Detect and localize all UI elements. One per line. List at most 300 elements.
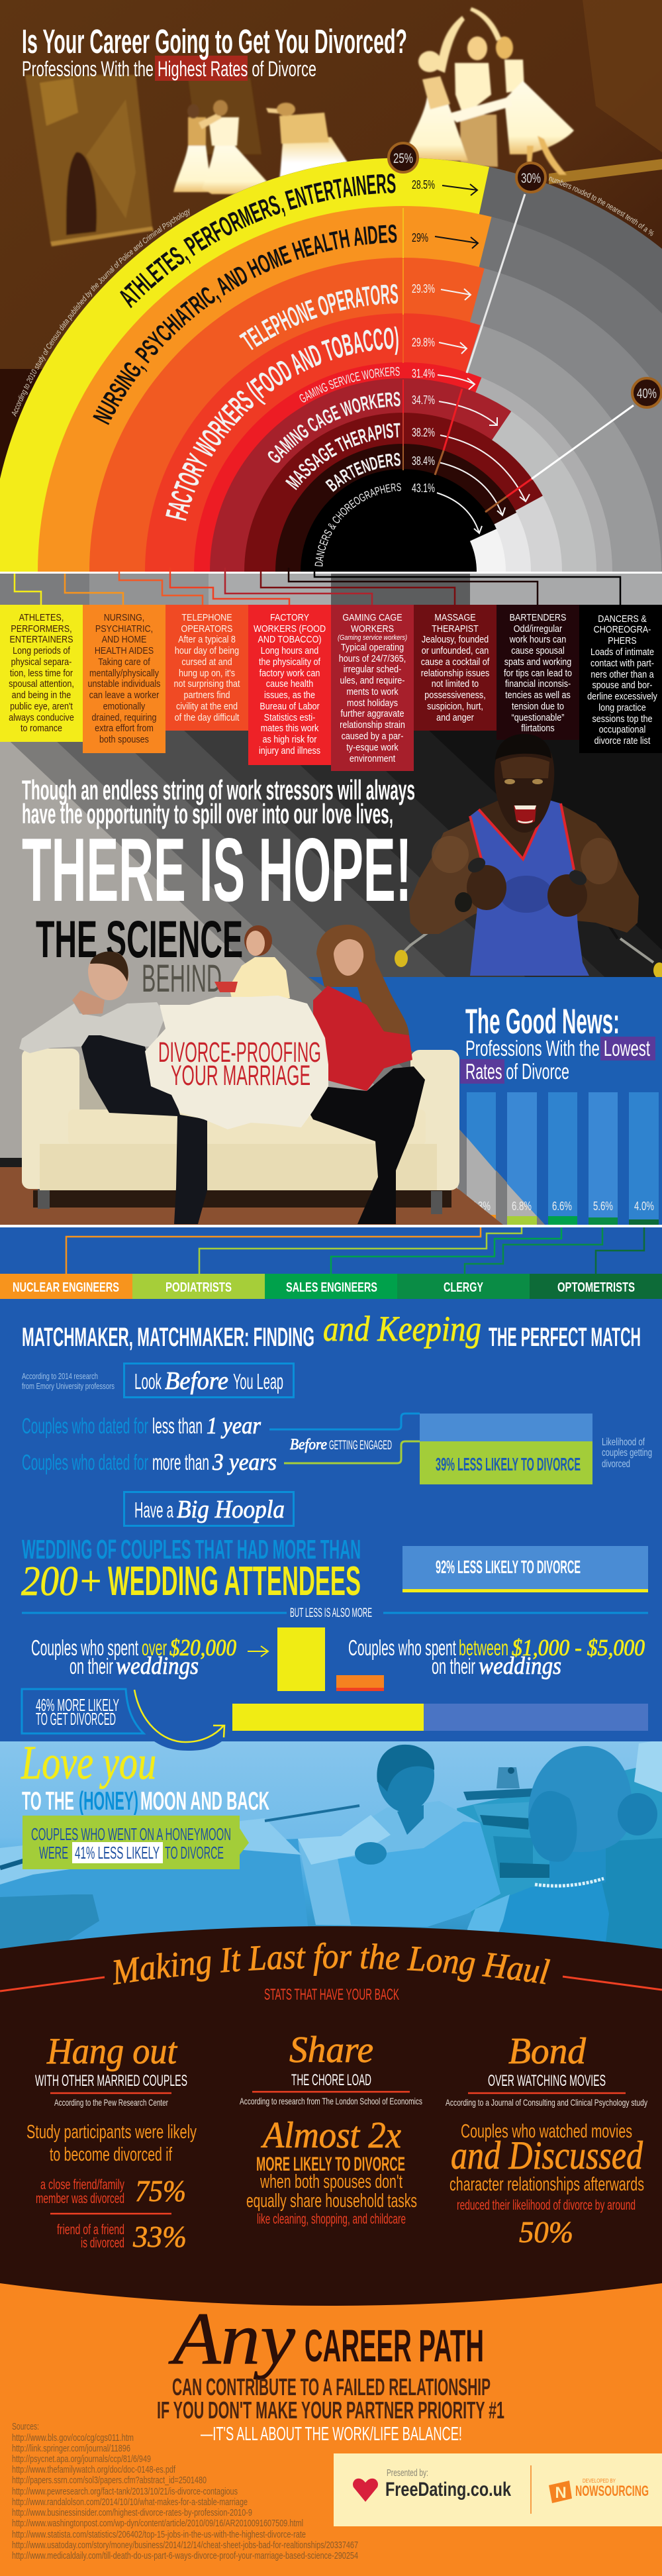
label: bartenders: BARTENDERS [325,453,401,492]
column: hang out: to become divorced if [50,2144,173,2165]
bar: clergy: 5.6% [593,1200,613,1213]
value: 38.2% [412,426,530,501]
counsellor [214,925,290,998]
column: factory: AND TOBACCO) [258,633,322,644]
column: factory: cause health [266,678,313,689]
column: factory: factory work can [260,667,320,678]
text: between 1000 and 5000 [348,1635,645,1680]
highlight behind subtitle [155,56,248,81]
box: look before you leap: You Leap [233,1369,283,1394]
blue curved tab [154,1741,222,1751]
column: telephone: OPERATORS [181,623,232,634]
bar: 39% less likely [420,1441,592,1484]
column: massage: and anger [436,711,474,723]
band: nursing [38,206,491,572]
callout: 46% more likely [22,1689,144,1733]
column: bartenders: cause spousal [511,644,565,656]
box: look before you leap [124,1363,294,1398]
column: share: when both spouses don't [260,2171,402,2192]
subheading [465,1036,650,1084]
closing message: Any [168,2298,295,2380]
text: over 20000: on their [70,1654,113,1678]
column: gaming cage: caused by a par- [342,730,403,741]
heading: honeymoon: (HONEY) [79,1787,138,1816]
column: athletes: and being in the [12,689,71,700]
closing message: —IT'S ALL ABOUT THE WORK/LIFE BALANCE! [201,2424,462,2445]
man [19,951,207,1224]
divider: but less is also more: BUT LESS IS ALSO MORE [290,1606,372,1620]
title: divorce-proofing [158,1037,321,1092]
stat: 75%: a close friend/family [40,2177,124,2192]
column: hang out: According to the Pew Research Center [54,2097,168,2108]
column: athletes: tion, less time for [10,667,73,678]
bar: 1000 to 5000 [336,1675,384,1691]
bar chart: lowest rates [467,1092,659,1225]
man on deck [298,1745,500,1927]
column: factory: Long hours and [261,644,318,656]
title block [22,23,407,81]
column: athletes: always conducive [9,711,74,723]
column: dancers: sessions top the [592,713,653,724]
right arm [541,805,639,933]
column: massage [414,605,496,731]
sweat shading on tank [500,876,553,913]
text: over 20000: $20,000 [169,1635,236,1661]
chains and handles [402,866,653,962]
text: over 20000: weddings [116,1653,199,1680]
column: dancers: occupational [599,723,645,735]
comparison: dating length [22,1412,652,1484]
note: data source on arc: According to 2010 study of Census data published by the Journal of Police and Criminal Psychology [12,209,189,417]
column: nursing: unstable individuals [88,678,161,689]
marker: 25%: 25% [393,151,413,166]
column: nursing: drained, requiring [91,711,157,723]
label: podiatrists: PODIATRISTS [166,1280,232,1295]
text: over 20000: over [142,1635,167,1660]
column: factory [248,605,331,765]
heading: long haul [0,1942,662,2004]
right dancer [470,7,574,175]
column: athletes: ATHLETES, [19,611,64,623]
logo text: FreeDating: FreeDating.co.uk [385,2479,511,2500]
source list: http://www.medicaldaily.com/till-death-do-us-part-6-ways-divorce-proof-your-marriage-based-science-290254 [12,2550,358,2561]
icon: heart logo [353,2479,378,2502]
label: gaming cage: GAMING CAGE WORKERS [267,392,401,463]
stat: wedding attendees: 200+ [21,1557,103,1604]
source list: http://www.businessinsider.com/highest-divorce-rates-by-profession-2010-9 [12,2507,252,2518]
column: nursing: PSYCHIATRIC, [95,623,153,634]
column: bond: 50% [519,2215,573,2249]
value: 29%: 29% [412,231,428,244]
band: telephone [89,258,485,572]
head [495,734,554,833]
bar: sales engineers: 6.6% [552,1200,572,1213]
source list: http://www.usatoday.com/story/money/business/2014/12/14/cheat-sheet-jobs-bad-for-realtionships/20337467 [12,2540,358,2551]
column: gaming cage: ments to work [346,686,399,697]
radial line: 40% [485,405,634,512]
label: nursing: NURSING, PSYCHIATRIC, AND HOME HEALTH AIDES [93,225,397,425]
front dancer [199,100,267,194]
marker: 30% [516,163,545,192]
column: athletes: physical separa- [11,656,71,667]
column: gaming cage [331,605,414,771]
column: gaming cage: hours of 24/7/365, [339,652,406,664]
chart labels: professions on arcs [93,174,401,567]
subtitle: Professions With the Highest Rates of Divorce [22,57,316,81]
source list: http://www.thefamilywatch.org/doc/doc-0148-es.pdf [12,2464,176,2475]
lowest-rate profession labels [0,1274,662,1299]
chart: highest divorce rates semicircle [0,158,543,572]
title: divorce-proofing: DIVORCE-PROOFING [158,1037,321,1068]
stat: wedding attendees: WEDDING OF COUPLES THAT HAD MORE THAN [22,1534,361,1565]
text: over 20000: Couples who spent [31,1635,138,1660]
column: hang out [26,2031,197,2253]
note: likelihood of divorce: divorced [602,1459,630,1470]
panel: credits [334,2453,662,2526]
label: athletes: ATHLETES, PERFORMERS, ENTERTAINERS [120,174,396,309]
column: factory: issues, as the [264,689,315,700]
label: gaming service: GAMING SERVICE WORKERS [299,367,400,403]
value: 29% [412,231,478,248]
bar: nuclear engineers [467,1092,496,1225]
value: 38.4%: 38.4% [412,454,435,468]
bar: podiatrists: 6.8% [512,1200,532,1213]
stage curtain middle [188,77,261,154]
blue tank top [470,800,589,976]
callout: 41% less likely: TO DIVORCE [165,1843,224,1863]
column: dancers: Loads of intimate [591,646,654,657]
source list [12,2421,358,2561]
column: bartenders: tension due to [512,700,564,711]
fists [455,854,589,917]
connector lines [269,1414,420,1463]
column: telephone: partners find [184,689,230,700]
label: nuclear engineers: NUCLEAR ENGINEERS [13,1280,119,1295]
column: athletes: ENTERTAINERS [9,633,73,644]
honeymoon text [21,1736,269,1869]
bar: 46 percent [232,1704,648,1731]
deck rail [265,1806,359,1821]
column: gaming cage: ules, and require- [340,674,405,686]
column: telephone: hour day of being [175,644,239,656]
column: bartenders: financial inconsis- [505,678,571,689]
band: gaming service [194,362,481,572]
curved arrow to bar [134,1690,224,1742]
column: gaming cage: environment [350,752,395,764]
label: optometrists: OPTOMETRISTS [557,1280,635,1295]
bar: optometrists [629,1092,659,1225]
stat: 75%: 75% [135,2174,186,2208]
column: share: like cleaning, shopping, and childcare [257,2212,406,2227]
column: gaming cage: most holidays [347,697,398,708]
column: share: Almost 2x [260,2115,401,2156]
column: bartenders [496,605,579,740]
column: dancers: DANCERS & [598,613,647,624]
box: have a big hoopla [124,1492,294,1526]
column: telephone [166,605,248,731]
column: bartenders: Odd/irregular [514,623,563,634]
highlight: rates [460,1059,504,1084]
bar: over 20000 [277,1627,325,1691]
script: love you: Love you [21,1736,156,1789]
column: massage: relationship issues [421,667,489,678]
closing message [157,2298,504,2445]
left arm [409,816,512,934]
science heading [36,909,243,1000]
callout: 46% more likely: 46% MORE LIKELY [36,1695,119,1715]
column: bartenders: flirtations [521,722,555,733]
column: massage: not limited to [432,678,479,689]
row: more than 3 years: 3 years [212,1449,277,1475]
column: dancers: contact with part- [591,657,654,668]
panel: hope section diagonal background [0,729,662,1225]
column: share: MORE LIKELY TO DIVORCE [256,2153,405,2175]
value: 34.7% [412,393,497,425]
callout: 41% less likely: 41% LESS LIKELY [75,1843,160,1863]
value: 29.3%: 29.3% [412,282,435,295]
column: share: equally share household tasks [246,2190,417,2212]
note: likelihood of divorce: Likelihood of [602,1437,645,1448]
column: share: Share [289,2030,373,2071]
box: look before you leap: Look [134,1369,162,1394]
panel: matchmaker blue background [0,1227,662,1741]
chart backdrop: grey semicircle rings [0,158,662,572]
boats and sea [457,1741,662,1954]
column: share: THE CHORE LOAD [291,2071,371,2089]
box: have a big hoopla: Have a [134,1498,173,1522]
column: bond [446,2031,647,2249]
woman on deck [467,1746,657,1954]
text: over 20000 [31,1635,236,1680]
source list: http://link.springer.com/journal/11896 [12,2443,130,2454]
box: have a big hoopla: Big Hoopla [177,1496,285,1523]
text: between 1000 and 5000: on their [432,1654,475,1678]
row: less than 1 year: 1 year [207,1412,261,1439]
divider strip with connectors [0,568,662,605]
column: hang out: Hang out [46,2031,177,2072]
column: athletes: to romance [21,722,62,733]
column: bartenders: work hours can [509,633,566,644]
heading: honeymoon: TO THE [22,1787,74,1816]
heading: long haul: Making It Last for the Long Haul [113,1942,551,1984]
source note: Emory: According to 2014 research [22,1372,98,1381]
label: massage: MASSAGE THERAPIST [285,423,400,490]
note: before getting engaged [290,1436,392,1453]
band: dancers [301,469,496,572]
column: factory: mates this work [261,722,318,733]
column: telephone: hung up on, it's [179,667,235,678]
source list: http://www.statista.com/statistics/206402/top-15-jobs-in-the-us-with-the-highest-divorce-rate [12,2529,306,2540]
label: dancers: DANCERS & CHOREOGRAPHERS [315,483,401,567]
illustration: large ballerinas [404,7,574,175]
column: factory: Bureau of Labor [260,700,320,711]
centre dancer [455,36,498,167]
source list: http://www.washingtonpost.com/wp-dyn/content/article/2010/09/16/AR2010091607509.html [12,2518,303,2529]
torn paper cloud [145,996,328,1129]
bar: clergy [589,1092,618,1225]
stat: 33%: 33% [132,2220,187,2253]
band: gaming cage [210,378,511,572]
chart scale markers [389,143,661,512]
stat: 75%: member was divorced [36,2191,124,2206]
left deck [0,1818,311,1954]
column: nursing: can leave a worker [89,689,160,700]
row: less than 1 year: less than [152,1414,203,1438]
value: 29.3% [412,282,471,300]
column: athletes: spousal attention, [9,678,74,689]
hope text block [22,774,415,920]
note: before getting engaged: GETTING ENGAGED [329,1439,392,1453]
stage curtain left [25,75,154,246]
heading: matchmaker: and Keeping [323,1309,481,1349]
column: nursing: mentally/physically [89,667,159,678]
label: optometrists [530,1274,662,1299]
stat: 33%: is divorced [81,2236,124,2251]
column: factory: injury and illness [259,745,320,756]
text: between 1000 and 5000: weddings [479,1653,561,1680]
source list: http://www.bls.gov/oco/cg/cgs011.htm [12,2432,134,2444]
chart values and arrows [412,178,530,533]
column: gaming cage: Typical operating [341,641,404,652]
band: bartenders [275,444,516,572]
value: 43.1% [412,482,482,533]
panel: honeymoon photo [0,1741,662,1954]
column: dancers: ners other than a [591,668,654,680]
bar: likelihood [420,1414,592,1441]
label: clergy: CLERGY [444,1280,483,1295]
yellow handles [395,950,662,978]
panel: long haul brown [0,1926,662,2306]
joined arms [447,97,512,123]
label: telephone: TELEPHONE OPERATORS [239,283,399,350]
band: athletes [0,158,489,572]
profession detail columns [0,605,662,771]
column: gaming cage: ty-esque work [346,741,399,752]
connectors to lowest-rate labels [66,1227,644,1274]
band: factory [145,313,481,572]
illustration: shouting strongman [395,734,662,978]
sofa [22,1049,459,1190]
column: telephone: of the day difficult [175,711,240,723]
column: dancers: CHOREOGRA- [594,623,651,635]
column: telephone: civility at the end [176,700,238,711]
row: less than 1 year: Couples who dated for [22,1414,148,1438]
label: factory: FACTORY WORKERS (FOOD AND TOBACCO) [166,326,399,521]
column: hang out: Study participants were likely [26,2122,197,2143]
column: massage: THERAPIST [432,623,479,634]
column: massage: cause a cocktail of [421,656,489,667]
title: divorce-proofing: YOUR MARRIAGE [171,1060,310,1092]
column: massage: possessiveness, [424,689,486,700]
column: factory: WORKERS (FOOD [254,623,326,634]
value: 28.5% [412,178,477,195]
sofa legs [38,1186,442,1214]
woman [310,925,425,1224]
box: look before you leap: Before [165,1367,228,1395]
callout: 41% less likely: COUPLES WHO WENT ON A HONEYMOON [31,1824,231,1844]
marker: 25% [389,143,418,172]
divider: white rule [0,1225,662,1227]
column: dancers: spouse and bor- [592,679,653,690]
column: gaming cage: irregular sched- [344,663,401,674]
value: 34.7%: 34.7% [412,393,435,407]
value: 38.2%: 38.2% [412,426,435,439]
label: clergy [397,1274,530,1299]
highlight: lowest [600,1037,655,1060]
stat: 33% [57,2220,187,2253]
value: 31.4%: 31.4% [412,367,435,380]
column: dancers: derline excessively [587,690,657,701]
marker: 40% [632,378,661,407]
floor [0,1167,503,1225]
callout: 46% more likely: TO GET DIVORCED [36,1709,116,1729]
source list: http://www.pewresearch.org/fact-tank/2013/10/21/is-divorce-contagious [12,2486,238,2497]
illustration: small ballerinas [173,100,355,194]
column: hang out: WITH OTHER MARRIED COUPLES [35,2072,187,2090]
heading: matchmaker: MATCHMAKER, MATCHMAKER: FINDING [22,1323,314,1352]
logo: Nowsourcing: N [555,2484,567,2502]
text: between 1000 and 5000: between [459,1635,508,1660]
comparison: wedding spend [22,1627,648,1733]
column: gaming cage: WORKERS [351,623,394,634]
text: between 1000 and 5000: $1,000 - $5,000 [512,1635,645,1661]
chest skin [479,798,549,859]
column: massage: suspicion, hurt, [427,700,483,711]
note: likelihood of divorce [602,1437,652,1470]
text: between 1000 and 5000: Couples who spent [348,1635,456,1660]
column: athletes: Long periods of [13,644,70,656]
value: 38.4% [412,454,505,515]
radial line: 30% [435,194,525,475]
panel: good news blue [308,977,662,1225]
callout: 41% less likely: WERE [39,1843,68,1863]
heading: long haul: STATS THAT HAVE YOUR BACK [264,1986,399,2004]
row: more than 3 years: more than [152,1450,209,1474]
third dancer [266,103,355,180]
source note: Emory: from Emory University professors [22,1382,115,1391]
column: athletes [0,605,83,742]
label: sales engineers [265,1274,397,1299]
column: gaming cage: relationship strain [340,719,405,730]
column: share: According to research from The London School of Economics [240,2096,422,2106]
callout: 41% less likely [23,1816,249,1869]
column: factory: as high risk for [263,733,317,745]
column: nursing [83,605,166,753]
logo: Nowsourcing: DEVELOPED BY [583,2478,616,2484]
column: nursing: both spouses [99,733,149,745]
column: nursing: AND HOME [102,633,146,644]
illustration: couple on sofa [0,925,503,1225]
column: bartenders: for tips can lead to [504,667,572,678]
source list: http://psycnet.apa.org/journals/ccp/81/6/949 [12,2453,151,2465]
science heading: BEHIND [142,957,222,1000]
note: before getting engaged: Before [290,1436,327,1453]
stat: wedding attendees [21,1534,648,1604]
stat: wedding attendees: WEDDING ATTENDEES [108,1559,361,1604]
bar: nuclear engineers: 7.3% [471,1200,491,1213]
column: athletes: PERFORMERS, [11,623,72,634]
column: bond: Bond [508,2031,587,2072]
science heading: THE SCIENCE [36,909,243,968]
stat: 33%: friend of a friend [57,2222,124,2238]
stat: 75% [36,2174,186,2208]
value: 31.4% [412,367,475,389]
column: nursing: NURSING, [104,611,144,623]
value: 29.8% [412,336,467,354]
marker: 30%: 30% [521,171,541,186]
source list: Sources: [12,2421,39,2432]
column: nursing: emotionally [103,700,145,711]
